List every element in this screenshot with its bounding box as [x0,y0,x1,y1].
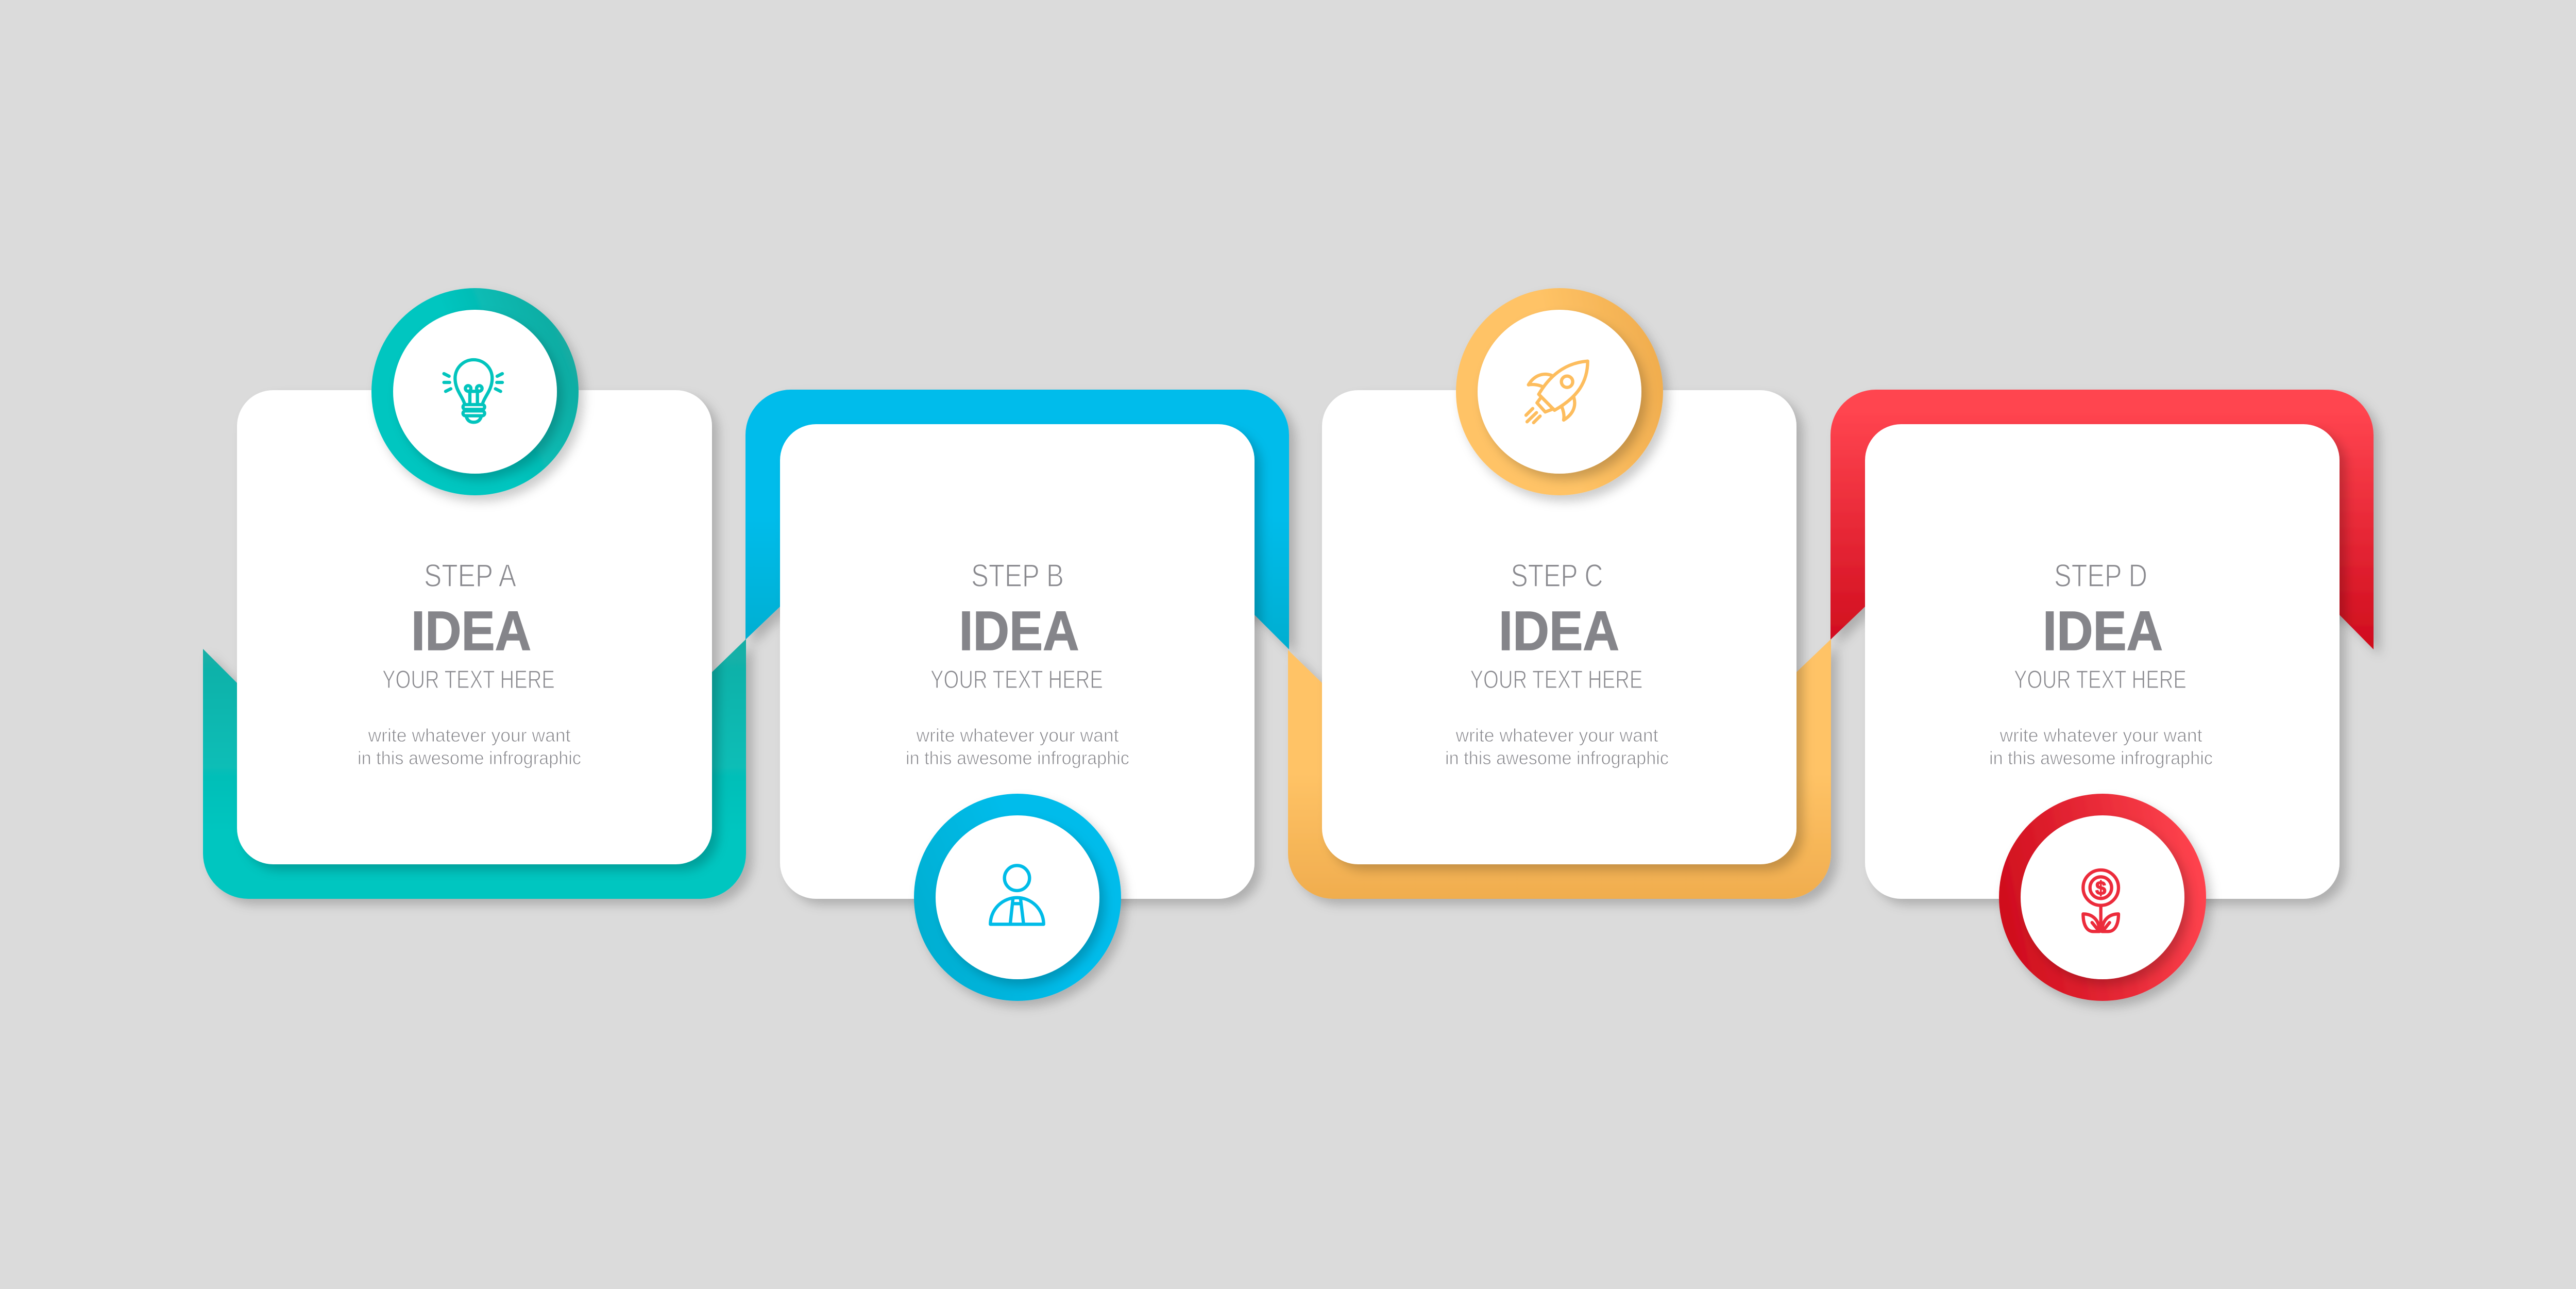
text block: step B: in this awesome infrographic [906,747,1129,768]
text block: step C: IDEA [1499,599,1619,662]
text block: step D: in this awesome infrographic [1989,747,2213,768]
text block: step A [358,558,581,768]
card: step D [1865,424,2340,899]
text block: step A: in this awesome infrographic [358,747,581,768]
ribbon: step A teal backing [203,639,746,899]
text block: step A: write whatever your want [368,725,571,746]
card: step B [780,424,1255,899]
text block: step D: STEP D [2054,558,2147,594]
icon badge: light bulb [371,288,579,495]
icon badge: person with tie [914,794,1121,1001]
text block: step B: write whatever your want [916,725,1119,746]
panel: step D [1831,390,2374,1001]
text block: step A: IDEA [411,599,531,662]
panel: step C [1288,288,1831,899]
card: step A [237,390,712,864]
ribbon: step B blue backing [745,390,1289,649]
text block: step A: YOUR TEXT HERE [382,666,555,694]
text block: step D: YOUR TEXT HERE [2014,666,2187,694]
text block: step D [1989,558,2213,768]
icon badge: rocket [1456,288,1663,495]
text block: step C: in this awesome infrographic [1445,747,1669,768]
text block: step B [906,558,1129,768]
ribbon: step C orange backing [1288,639,1831,899]
text block: step C: STEP C [1511,558,1603,594]
card: step C [1322,390,1797,864]
text block: step C [1445,558,1669,768]
ribbon: step D red backing [1831,390,2374,649]
text block: step D: write whatever your want [1999,725,2202,746]
panel: step B [745,390,1289,1001]
text block: step C: write whatever your want [1455,725,1658,746]
text block: step B: IDEA [959,599,1079,662]
text block: step B: YOUR TEXT HERE [930,666,1103,694]
text block: step C: YOUR TEXT HERE [1470,666,1642,694]
icon badge: money plant [1999,794,2206,1001]
text block: step D: IDEA [2043,599,2163,662]
text block: step A: STEP A [424,558,517,594]
text block: step B: STEP B [971,558,1064,594]
icon badge: money plant: $ [2095,877,2106,898]
panel: step A [203,288,746,899]
